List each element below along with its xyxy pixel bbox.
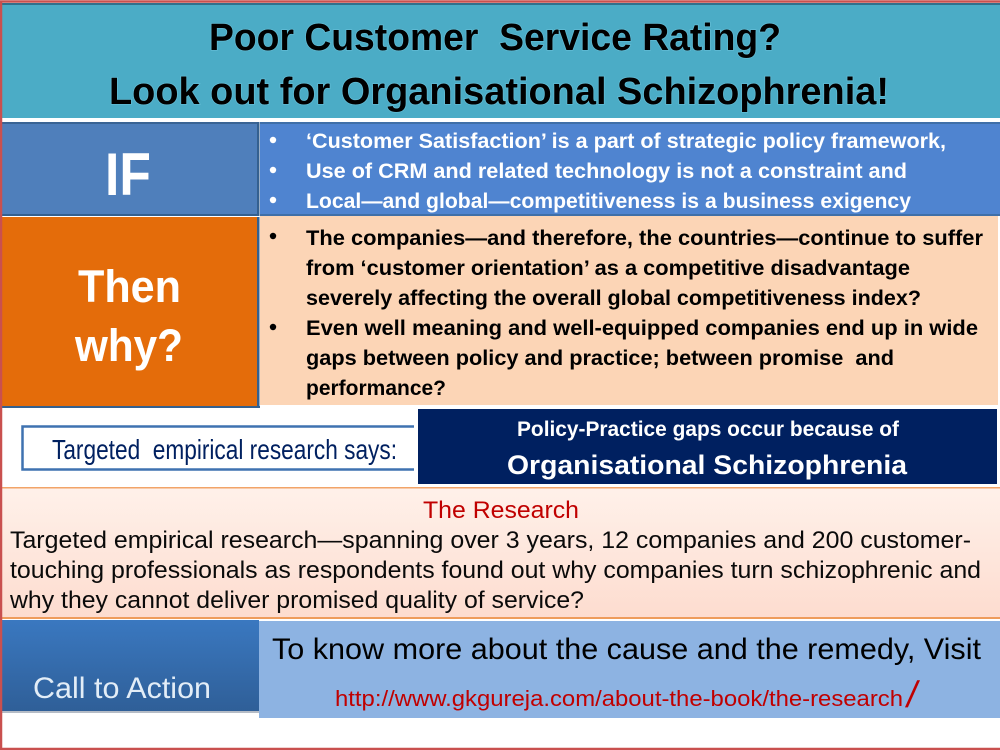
heading: title text (109, 17, 889, 113)
panel: then why label (2, 217, 260, 408)
text block: research summary: Targeted empirical research—spanning over 3 years, 12 companies and 200 customer- (10, 527, 971, 554)
bullet list: questions: The companies—and therefore, the countries—continue to suffer (306, 227, 983, 250)
bullet list: conditions: Local—and global—competitiveness is a business exigency (306, 190, 911, 213)
panel: call to action link: http://www.gkgureja.com/about-the-book/the-research (335, 686, 903, 711)
bullet list: conditions (270, 130, 946, 213)
text block: research summary (9, 527, 981, 614)
panel: call to action link (259, 621, 1000, 718)
panel: the research (2, 487, 1000, 619)
panel: IF label: IF (105, 140, 151, 208)
panel: title banner (2, 3, 1000, 118)
panel: call to action label: Call to Action (33, 672, 211, 705)
panel: IF label (2, 122, 260, 216)
bullet list: questions: from ‘customer orientation’ as a competitive disadvantage (306, 257, 910, 280)
panel: then why label: Then (78, 261, 181, 312)
panel: IF conditions (260, 122, 1000, 216)
bullet list: questions: performance? (306, 377, 446, 400)
bullet list: questions: Even well meaning and well-equipped companies end up in wide (306, 317, 978, 340)
bullet list: questions: gaps between policy and practice; between promise and (306, 347, 894, 370)
panel: call to action link: To know more about the cause and the remedy, Visit (272, 633, 982, 666)
bullet list: questions: severely affecting the overall global competitiveness index? (306, 287, 921, 310)
text block: research summary: why they cannot deliver promised quality of service? (9, 587, 584, 614)
bullet list: conditions: Use of CRM and related technology is not a constraint and (306, 160, 907, 183)
heading: title text: Poor Customer Service Rating? (209, 17, 781, 59)
bullet list: questions (270, 227, 983, 400)
panel: call to action label (2, 620, 259, 713)
bullet list: conditions: ‘Customer Satisfaction’ is a part of strategic policy framework, (306, 130, 946, 153)
callout: policy practice gaps: Policy-Practice gaps occur because of (517, 418, 900, 441)
panel: then why label: why? (74, 320, 183, 371)
callout: targeted research says (22, 426, 414, 470)
panel: then why questions (260, 216, 998, 405)
heading: the research: The Research (423, 497, 579, 524)
panel: call to action link: / (904, 673, 922, 715)
text block: research summary: touching professionals as respondents found out why companies turn schizophrenic and (10, 557, 981, 584)
callout: policy practice gaps: Organisational Schizophrenia (507, 450, 908, 480)
heading: title text: Look out for Organisational Schizophrenia! (109, 71, 889, 113)
callout: targeted research says: Targeted empirical research says: (52, 434, 397, 465)
callout: policy practice gaps (418, 409, 997, 484)
